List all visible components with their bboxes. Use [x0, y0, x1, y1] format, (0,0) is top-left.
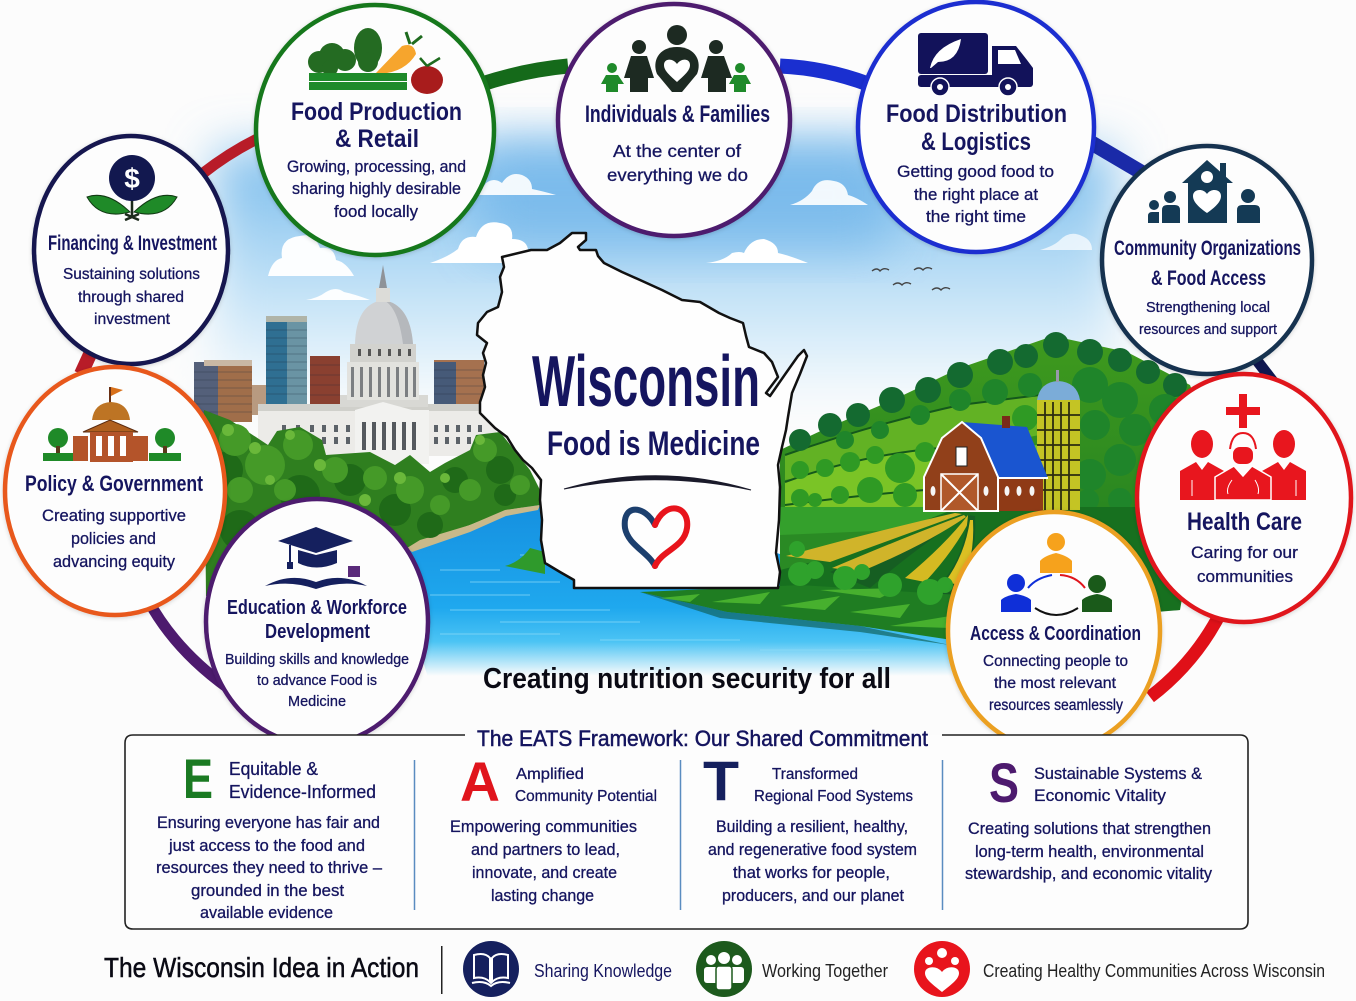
label: sharing knowledge: Sharing Knowledge — [534, 961, 672, 981]
column S: Sustainable Systems & — [1034, 764, 1203, 783]
description: to advance Food is — [257, 672, 377, 689]
icon: money plant: $ — [124, 163, 140, 194]
description: Sustaining solutions — [63, 266, 200, 283]
icon: delivery truck — [918, 33, 1033, 96]
panel: Community Organizations & Food Access — [1102, 146, 1312, 374]
description — [225, 651, 409, 710]
heading — [886, 100, 1067, 156]
heading: Access & Coordination — [970, 623, 1141, 645]
description: communities — [1197, 567, 1293, 586]
description: Caring for our — [1191, 543, 1298, 562]
silo — [1037, 370, 1080, 510]
icon: health workers — [1180, 394, 1306, 500]
heading: Individuals & Families — [585, 101, 770, 128]
birds — [872, 268, 950, 290]
icon: connected people — [1001, 533, 1112, 615]
panel: EATS framework — [125, 726, 1248, 929]
panel: Access & Coordination — [948, 512, 1160, 750]
description — [42, 506, 186, 571]
framework title: The EATS Framework: Our Shared Commitment — [477, 726, 928, 751]
Wisconsin state panel — [477, 233, 807, 588]
column A — [450, 750, 657, 905]
column T: Regional Food Systems — [754, 788, 913, 805]
heading: Development — [265, 621, 370, 643]
column A: innovate, and create — [472, 864, 617, 882]
description — [1191, 543, 1298, 586]
description: resources seamlessly — [989, 697, 1123, 714]
column A: Community Potential — [515, 788, 657, 805]
column E: resources they need to thrive – — [156, 859, 383, 877]
description: food locally — [334, 203, 419, 221]
column S: Creating solutions that strengthen — [968, 820, 1211, 838]
panel: Policy & Government — [5, 367, 225, 615]
footer: The Wisconsin Idea in Action — [104, 941, 1325, 997]
column A: and partners to lead, — [471, 841, 620, 859]
description: Strengthening local — [1146, 299, 1270, 316]
description: the right place at — [914, 186, 1038, 204]
heading — [227, 597, 407, 643]
column T: that works for people, — [733, 864, 890, 882]
footer heading: The Wisconsin Idea in Action — [104, 952, 419, 983]
column E — [156, 747, 383, 922]
description: policies and — [71, 529, 156, 548]
column S: Economic Vitality — [1034, 786, 1166, 805]
column S: stewardship, and economic vitality — [965, 865, 1213, 883]
heading: Education & Workforce — [227, 597, 407, 619]
description: Creating supportive — [42, 506, 186, 525]
column E: Evidence-Informed — [229, 782, 376, 802]
description: Connecting people to — [983, 653, 1128, 670]
heading: Financing & Investment — [48, 232, 217, 255]
icon: heart logo — [625, 508, 687, 566]
description — [607, 141, 748, 185]
panel: Food Production & Retail — [256, 5, 494, 255]
column A: A — [460, 750, 500, 813]
ring segments connecting circles — [81, 66, 1278, 697]
rolling farm landscape — [640, 332, 1210, 645]
description — [287, 158, 466, 221]
swoosh — [564, 476, 751, 490]
sky backdrop — [215, 140, 1115, 400]
description: the most relevant — [994, 675, 1117, 692]
icon: working together people — [696, 941, 752, 997]
state subtitle: Food is Medicine — [547, 425, 760, 463]
heading — [1114, 237, 1301, 290]
description: investment — [94, 311, 171, 328]
label: working together: Working Together — [762, 961, 888, 981]
column T: Building a resilient, healthy, — [716, 818, 908, 836]
description: Growing, processing, and — [287, 158, 466, 176]
icon: produce crate — [308, 28, 443, 94]
column T: T — [703, 749, 739, 812]
column E: grounded in the best — [191, 882, 344, 900]
description: Medicine — [288, 693, 346, 710]
icon: government building — [43, 387, 181, 462]
panel: Food Distribution & Logistics — [858, 2, 1094, 252]
description — [983, 653, 1128, 714]
column A: Amplified — [516, 766, 584, 783]
description: through shared — [78, 289, 184, 306]
column T: and regenerative food system — [708, 841, 917, 859]
heading: Policy & Government — [25, 471, 204, 496]
heading: Food Distribution — [886, 100, 1067, 128]
icon: money plant — [87, 155, 177, 220]
description: Getting good food to — [897, 163, 1054, 181]
icon: graduation cap and book — [265, 527, 367, 589]
panel: Health Care — [1137, 374, 1351, 622]
heading: & Retail — [335, 125, 419, 153]
icon: family — [601, 25, 751, 92]
description: Building skills and knowledge — [225, 651, 409, 668]
state title: Wisconsin — [532, 342, 760, 422]
column E: just access to the food and — [168, 837, 365, 855]
column T: Transformed — [772, 766, 858, 783]
description: advancing equity — [53, 552, 175, 571]
heading: Health Care — [1187, 508, 1302, 536]
panel: Individuals & Families — [558, 4, 790, 236]
forest on left river bank — [204, 410, 540, 620]
description — [63, 266, 200, 328]
description: everything we do — [607, 165, 748, 185]
description — [897, 163, 1054, 226]
column S: long-term health, environmental — [975, 843, 1204, 861]
description: the right time — [926, 208, 1026, 226]
column E: Equitable & — [229, 759, 318, 779]
heading: & Food Access — [1151, 267, 1266, 290]
description: At the center of — [613, 141, 741, 161]
panel: Financing & Investment — [34, 136, 228, 364]
state outline — [477, 233, 807, 588]
description — [1139, 299, 1278, 338]
column S: S — [989, 751, 1019, 814]
river — [405, 500, 1000, 678]
icon: community house — [1148, 160, 1260, 223]
state capitol building — [258, 265, 496, 464]
clouds — [268, 174, 1092, 300]
column E: Ensuring everyone has fair and — [157, 814, 380, 832]
river bank below state — [505, 548, 545, 574]
heading: Food Production — [291, 98, 462, 126]
column T — [703, 749, 917, 905]
description: sharing highly desirable — [292, 180, 461, 198]
icon: sharing knowledge book — [463, 941, 519, 997]
panel: Education & Workforce Development — [206, 499, 428, 745]
column T: producers, and our planet — [722, 887, 904, 905]
skyline buildings — [194, 316, 484, 422]
column E: E — [183, 747, 213, 810]
tagline: Creating nutrition security for all — [483, 663, 891, 695]
icon: healthy communities heart — [914, 941, 970, 997]
heading: & Logistics — [921, 128, 1031, 156]
heading — [291, 98, 462, 153]
column E: available evidence — [200, 904, 333, 922]
description: resources and support — [1139, 321, 1278, 338]
barn — [924, 416, 1048, 511]
column A: lasting change — [491, 887, 594, 905]
column S — [965, 751, 1213, 883]
column A: Empowering communities — [450, 818, 637, 836]
